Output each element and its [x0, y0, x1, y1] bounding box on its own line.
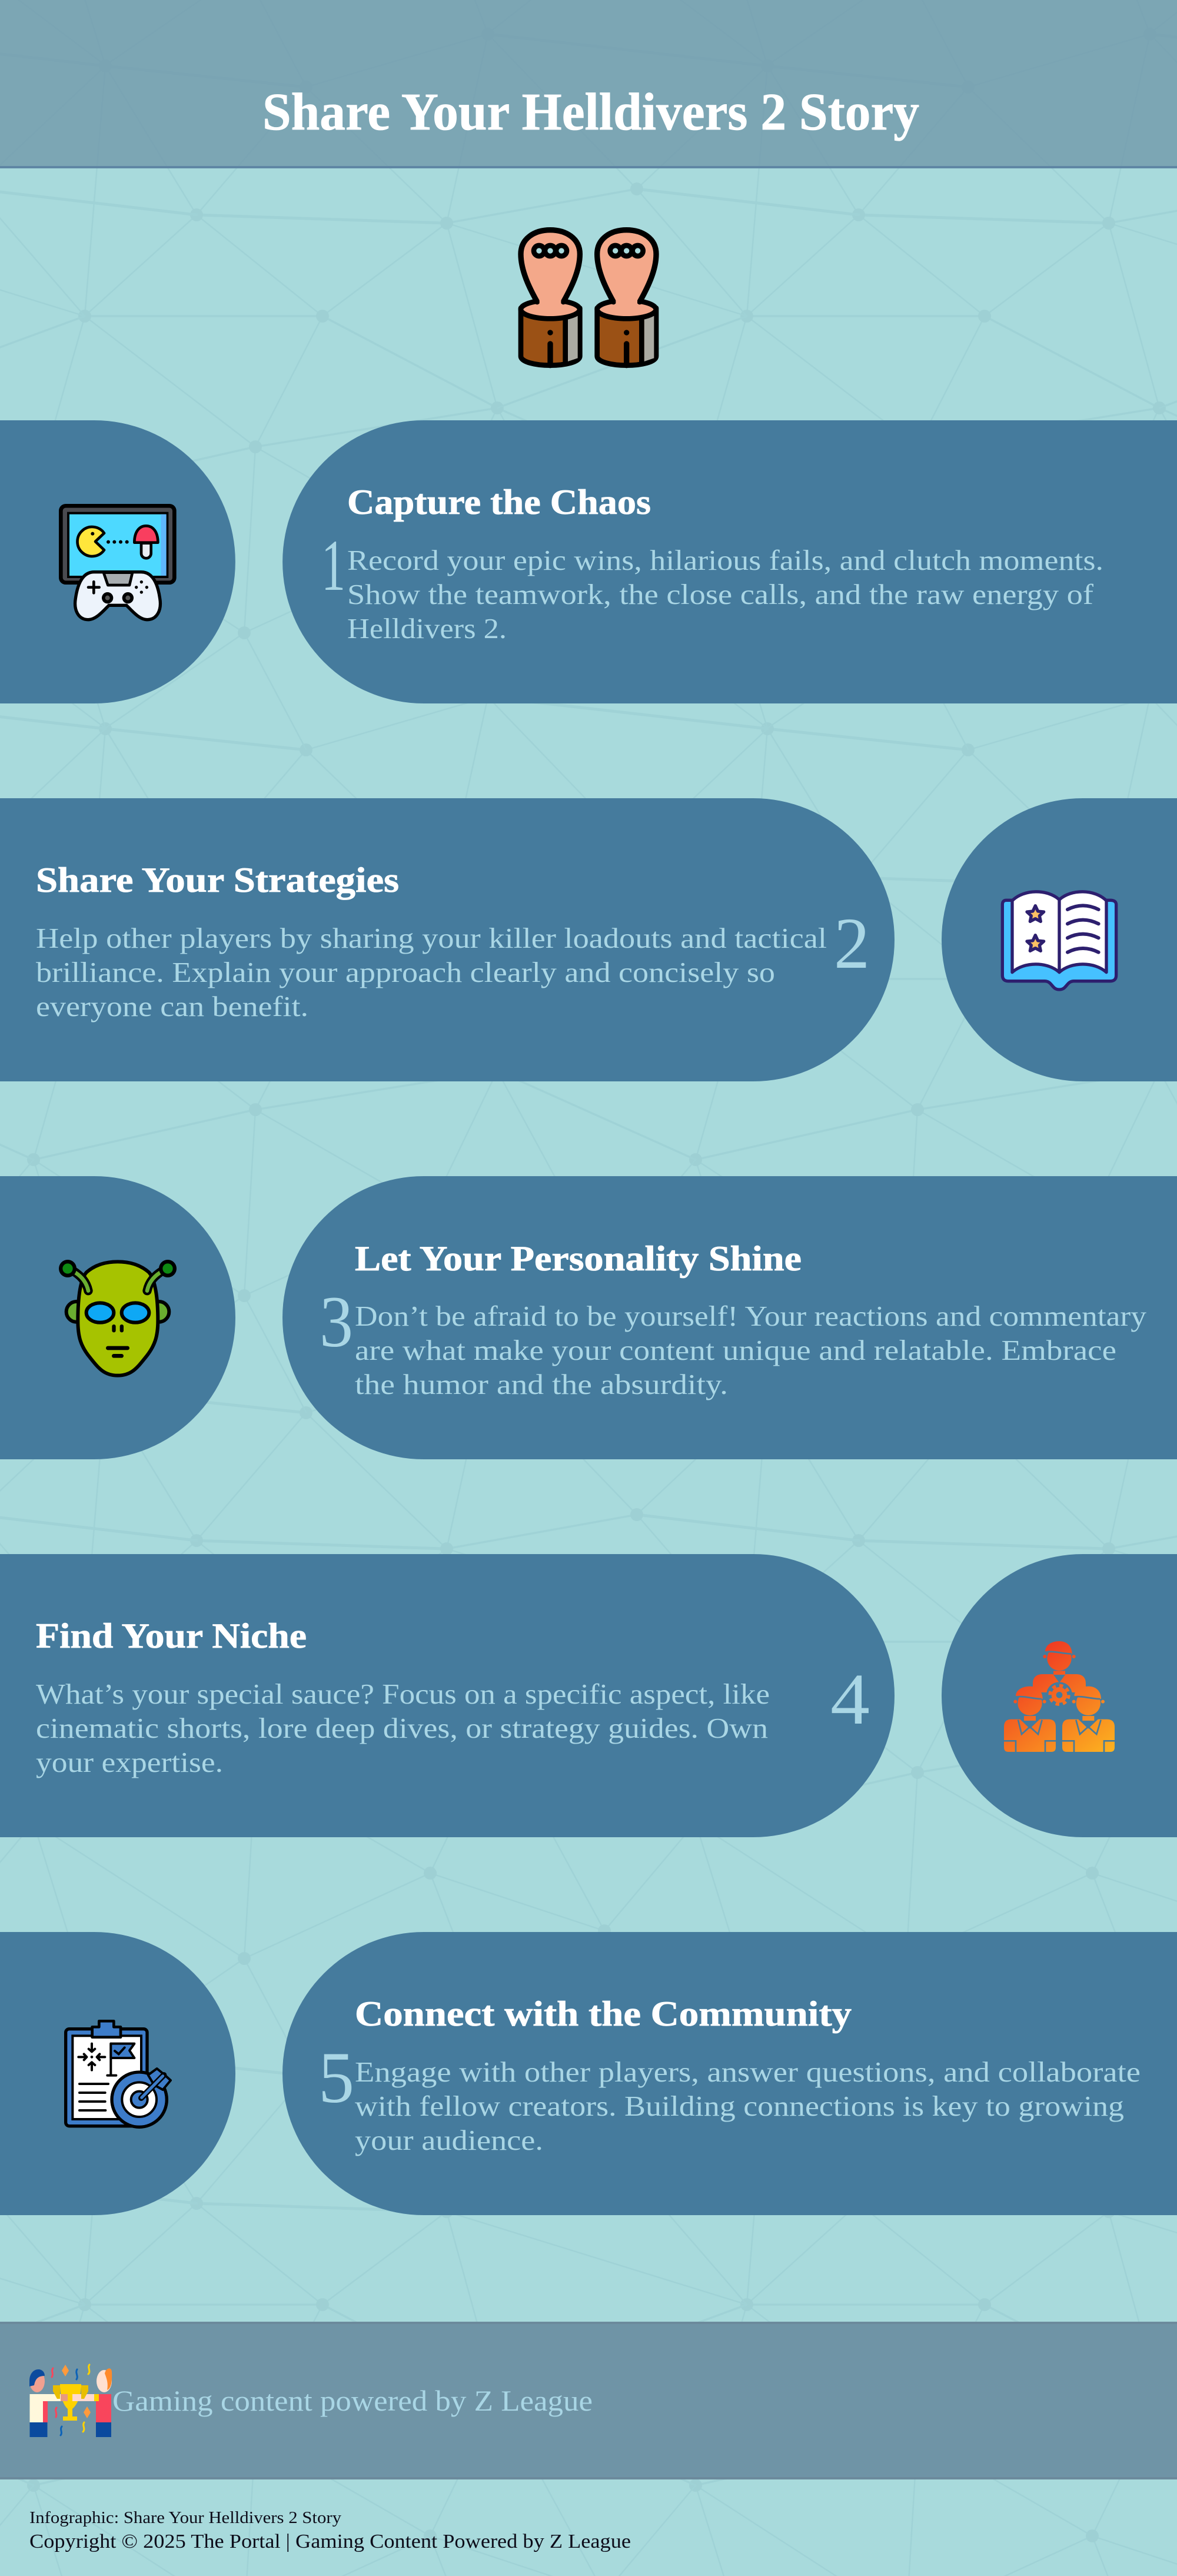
- heading: Connect with the Community: Connect with the Community: [355, 1994, 852, 2033]
- panel: step 3 icon circle: [0, 1176, 235, 1459]
- panel: step 2 text: [0, 798, 895, 1081]
- panel: step 4 text: [0, 1554, 895, 1837]
- body: step 2: brilliance. Explain your approach clearly and concisely so: [36, 956, 775, 988]
- heading: Share Your Strategies: Share Your Strategies: [36, 861, 399, 899]
- icon: clipboard with target: [66, 2021, 171, 2127]
- heading: Find Your Niche: Find Your Niche: [36, 1616, 307, 1655]
- step number 4: 4: [830, 1659, 870, 1740]
- icon: open book with stars: [1002, 892, 1116, 990]
- body: step 3: [355, 1300, 1147, 1400]
- step number 5: 5: [318, 2037, 354, 2118]
- copyright line: Copyright © 2025 The Portal | Gaming Content Powered by Z League: [29, 2531, 631, 2552]
- source line: Infographic: Share Your Helldivers 2 Story: [29, 2508, 342, 2527]
- icon: two people with trophy: [29, 2365, 112, 2437]
- body: step 2: [36, 922, 827, 1023]
- step number 2: 2: [834, 903, 870, 984]
- body: step 5: with fellow creators. Building connections is key to growing: [355, 2090, 1124, 2122]
- body: step 2: everyone can benefit.: [36, 990, 308, 1023]
- panel: step 4 icon circle: [942, 1554, 1177, 1837]
- body: step 4: What’s your special sauce? Focus on a specific aspect, like: [36, 1678, 770, 1710]
- panel: step 1 icon circle: [0, 420, 235, 703]
- title: Share Your Helldivers 2 Story: [262, 83, 919, 141]
- heading: Capture the Chaos: Capture the Chaos: [347, 483, 651, 522]
- body: step 1: Helldivers 2.: [347, 612, 507, 645]
- heading: Let Your Personality Shine: Let Your Personality Shine: [355, 1239, 802, 1278]
- step number 1: 1: [321, 525, 345, 606]
- panel: step 1 text: [282, 420, 1177, 703]
- body: step 4: cinematic shorts, lore deep dives, or strategy guides. Own: [36, 1712, 768, 1744]
- footer band: [0, 2322, 1177, 2479]
- body: step 1: [347, 544, 1103, 645]
- body: step 1: Show the teamwork, the close calls, and the raw energy of: [347, 578, 1094, 610]
- step number 3: 3: [320, 1282, 353, 1362]
- body: step 3: Don’t be afraid to be yourself! Your reactions and commentary: [355, 1300, 1147, 1332]
- body: step 5: your audience.: [355, 2124, 543, 2156]
- panel: step 5 text: [282, 1932, 1177, 2215]
- panel: step 2 icon circle: [942, 798, 1177, 1081]
- body: step 5: [355, 2056, 1141, 2156]
- panel: step 5 icon circle: [0, 1932, 235, 2215]
- body: step 1: Record your epic wins, hilarious fails, and clutch moments.: [347, 544, 1103, 576]
- icon: team with gear: [1004, 1641, 1115, 1752]
- body: step 4: your expertise.: [36, 1746, 223, 1778]
- body: step 4: [36, 1678, 770, 1778]
- body: step 3: the humor and the absurdity.: [355, 1368, 728, 1400]
- body: step 2: Help other players by sharing your killer loadouts and tactical: [36, 922, 827, 954]
- icon: alien head: [59, 1260, 177, 1376]
- icon: game monitor and controller: [61, 506, 174, 620]
- icon: two figures on drums: [521, 230, 656, 366]
- body: step 5: Engage with other players, answer questions, and collaborate: [355, 2056, 1141, 2088]
- header band: [0, 0, 1177, 168]
- footer tagline: Gaming content powered by Z League: [112, 2384, 593, 2417]
- body: step 3: are what make your content unique and relatable. Embrace: [355, 1334, 1116, 1366]
- panel: step 3 text: [282, 1176, 1177, 1459]
